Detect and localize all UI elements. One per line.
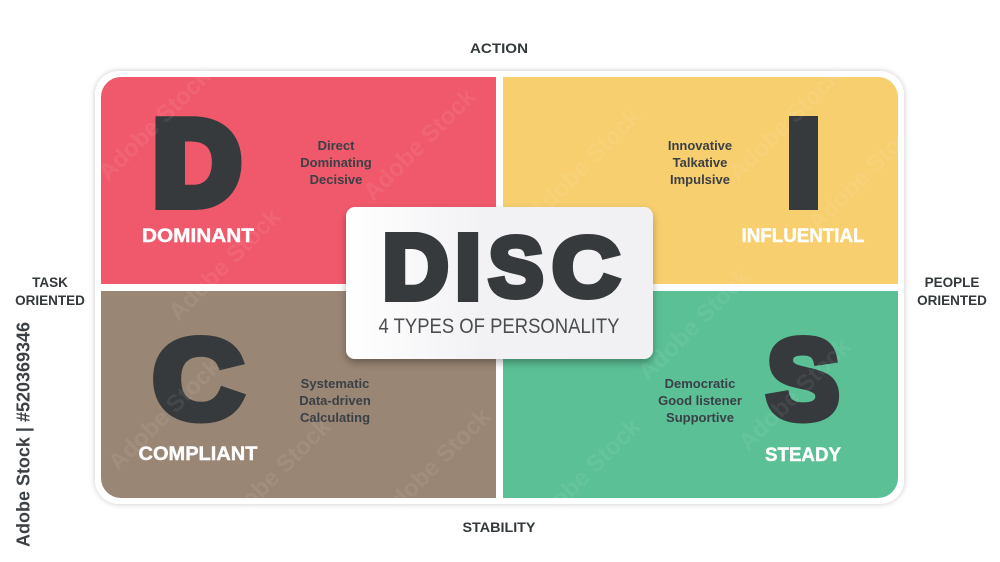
axis label: task oriented: TASK (32, 275, 68, 290)
traits: compliant: Data-driven (299, 393, 371, 408)
watermark: Adobe Stock (633, 263, 757, 386)
panel: dominant (101, 77, 496, 284)
outer frame (95, 71, 904, 504)
traits: steady: Good listener (658, 393, 742, 408)
traits: influential: Innovative (668, 138, 732, 153)
letter C: C (153, 317, 243, 442)
watermark: Adobe Stock (93, 63, 217, 186)
watermark: Adobe Stock (523, 103, 647, 226)
axis label: people oriented: ORIENTED (917, 293, 987, 308)
axis label: task oriented: ORIENTED (15, 293, 85, 308)
stock id: Adobe Stock | #520369346 (14, 322, 34, 547)
watermark: Adobe Stock (803, 113, 927, 236)
watermark: Adobe Stock (733, 333, 857, 456)
watermark: Adobe Stock (358, 83, 482, 206)
label: compliant: COMPLIANT (138, 444, 258, 465)
letter I (789, 116, 818, 210)
traits: influential: Impulsive (670, 172, 730, 187)
subtitle: 4 TYPES OF PERSONALITY (378, 315, 620, 338)
traits: dominant: Decisive (310, 172, 362, 187)
title: C (552, 220, 620, 314)
traits: steady: Democratic (665, 376, 735, 391)
center card (346, 207, 653, 359)
axis label: action: ACTION (470, 41, 528, 56)
watermark: Adobe Stock (163, 203, 287, 326)
letter S: S (767, 317, 839, 442)
title (385, 232, 622, 302)
watermark (93, 63, 927, 536)
label: influential: INFLUENTIAL (742, 226, 865, 247)
watermark: Adobe Stock (213, 413, 337, 536)
watermark: Adobe Stock (523, 413, 647, 536)
watermark: Adobe Stock (103, 353, 227, 476)
traits: influential: Talkative (673, 155, 727, 170)
panel: influential (503, 77, 898, 284)
label: steady: STEADY (765, 445, 841, 466)
traits: steady: Supportive (666, 410, 734, 425)
title: S (488, 220, 544, 314)
label: dominant: DOMINANT (142, 226, 254, 247)
watermark: Adobe Stock (723, 63, 847, 186)
traits: compliant: Calculating (300, 410, 370, 425)
title: I (455, 216, 481, 318)
panel: steady (503, 291, 898, 498)
watermark: Adobe Stock (373, 403, 497, 526)
letter D: D (154, 97, 240, 230)
traits: compliant: Systematic (301, 376, 369, 391)
axis label: stability: STABILITY (462, 520, 536, 535)
traits: dominant: Dominating (300, 155, 372, 170)
title: D (382, 216, 448, 318)
axis label: people oriented: PEOPLE (925, 275, 979, 290)
panel: compliant (101, 291, 496, 498)
traits: dominant: Direct (318, 138, 355, 153)
